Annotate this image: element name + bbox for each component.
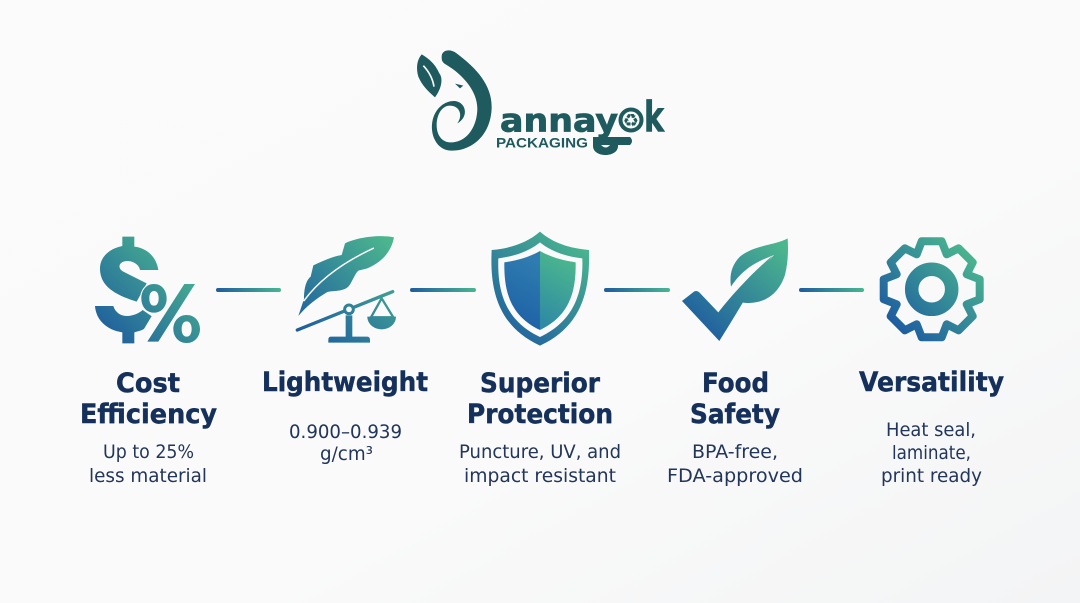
heading: Lightweight xyxy=(262,367,428,398)
column: Versatility xyxy=(859,241,1004,487)
description: 0.900–0.939 xyxy=(289,421,402,443)
description: Puncture, UV, and xyxy=(459,441,621,463)
icon: check with leaf xyxy=(682,238,788,341)
icon: gear xyxy=(884,241,980,337)
heading: Cost xyxy=(116,368,180,399)
heading xyxy=(690,368,780,430)
arrow: connector 4 xyxy=(799,288,864,292)
logo subtitle: PACKAGING xyxy=(496,134,588,150)
icon: feather and scale xyxy=(297,236,396,343)
description: BPA-free, xyxy=(692,441,778,463)
heading: Efficiency xyxy=(80,399,217,430)
description: impact resistant xyxy=(464,465,616,487)
description: g/cm³ xyxy=(320,443,373,465)
description: laminate, xyxy=(892,442,971,464)
heading xyxy=(467,368,613,430)
logo letter k: k xyxy=(644,92,665,142)
column: Cost Efficiency xyxy=(80,237,217,487)
arrow: connector 3 xyxy=(604,288,670,292)
description: FDA-approved xyxy=(667,465,803,487)
description xyxy=(289,421,402,465)
arrow: connector 1 xyxy=(216,288,281,292)
icon: shield xyxy=(491,232,589,346)
column: Food Safety xyxy=(667,238,803,487)
column: Superior Protection xyxy=(459,232,621,487)
description: print ready xyxy=(881,465,982,487)
heading: Food xyxy=(702,368,769,399)
logo wordmark: annay xyxy=(500,102,618,140)
column: Lightweight xyxy=(262,236,428,465)
description xyxy=(667,441,803,487)
y descender bar xyxy=(593,137,632,155)
description: Heat seal, xyxy=(886,419,976,441)
heading: Versatility xyxy=(859,367,1004,398)
icon: dollar and percent xyxy=(95,237,200,343)
description: less material xyxy=(89,465,207,487)
heading xyxy=(80,368,217,430)
logo: Dannayak Packaging xyxy=(417,50,665,155)
description xyxy=(459,441,621,487)
description: Up to 25% xyxy=(103,441,194,463)
heading: Safety xyxy=(690,399,780,430)
recycling ring: ♻ xyxy=(623,110,639,132)
description xyxy=(881,419,982,487)
logo mark: elephant trunk spiral xyxy=(417,50,492,151)
heading: Protection xyxy=(467,399,613,430)
arrow: connector 2 xyxy=(410,288,476,292)
description xyxy=(89,441,207,487)
heading: Superior xyxy=(480,368,601,399)
